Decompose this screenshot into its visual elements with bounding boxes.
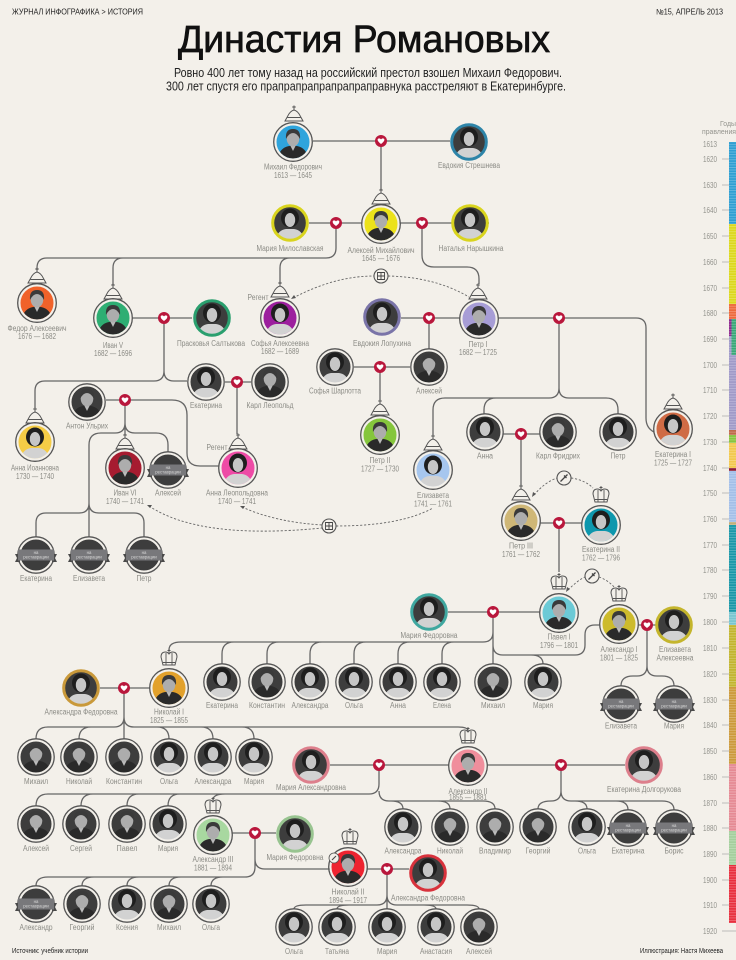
timeline year labels: 1770 — [703, 541, 717, 550]
person: Петр III: 1761 — 1762 — [502, 550, 540, 559]
person: Евдокия Стрешнева — [438, 125, 500, 170]
person: Елизавета: 1741 — 1761 — [414, 500, 452, 508]
person: Екатерина, portrait under restoration — [15, 537, 57, 583]
person: Елизавета, portrait under restoration — [600, 686, 642, 730]
person: Софья Алексеевна — [248, 293, 309, 356]
children of Александр III: Георгий — [70, 923, 94, 932]
person: Александр I — [600, 605, 638, 662]
timeline year labels: 1820 — [703, 670, 717, 679]
children of Николай I: Николай — [66, 777, 92, 786]
person: Петр I — [459, 300, 498, 357]
person: Алексей, portrait under restoration: на — [166, 465, 171, 470]
person: Анна — [467, 414, 503, 460]
person: Петр, portrait under restoration: на — [142, 550, 147, 555]
children of Александр II, first row: Алексей — [23, 844, 49, 853]
person: Екатерина II — [582, 506, 620, 562]
person: Анна Иоанновна: 1730 — 1740 — [16, 472, 54, 481]
person: Екатерина Долгорукова — [607, 748, 681, 794]
person: Антон Ульрих: Антон Ульрих — [66, 422, 108, 430]
person: Елизавета Алексеевна: Елизавета — [659, 645, 691, 654]
timeline heading: правления — [702, 129, 736, 136]
person: Елизавета, portrait under restoration: на — [619, 699, 624, 704]
timeline year labels: 1910 — [703, 901, 717, 910]
person: Мария Федоровна: Мария Федоровна — [266, 853, 324, 862]
children of Александр II, first row: Сергей — [70, 844, 92, 853]
timeline year labels: 1920 — [703, 927, 717, 936]
person: Софья Алексеевна: Регент — [248, 293, 269, 302]
children of Александр III: Михаил — [157, 923, 181, 932]
person: Мария, portrait under restoration — [653, 686, 695, 730]
person: Петр: Петр — [610, 452, 626, 460]
person: Петр I: 1682 — 1725 — [459, 348, 497, 357]
children of Александр II, first row: Павел — [116, 844, 138, 853]
person: Александр II: Александр II — [448, 787, 488, 796]
person: Иван V: 1682 — 1696 — [94, 349, 132, 358]
person: Екатерина, portrait under restoration — [607, 810, 649, 856]
timeline year labels: 1680 — [703, 309, 717, 318]
timeline year labels: 1730 — [703, 438, 717, 447]
person: Петр II — [361, 416, 399, 474]
children of Александр III: Ольга — [202, 923, 220, 932]
children of Николай II: Мария — [377, 947, 397, 956]
person: Мария, portrait under restoration: на — [672, 699, 677, 704]
children of Александр II, second row: Георгий — [526, 846, 550, 856]
person: Екатерина I: 1725 — 1727 — [654, 458, 692, 468]
timeline year labels: 1670 — [703, 284, 717, 293]
person: Александр II: 1855 — 1881 — [449, 793, 487, 802]
person: Мария Федоровна: Мария Федоровна — [400, 631, 458, 640]
person: Борис, portrait under restoration: на — [672, 823, 677, 828]
children of Павел I: Ольга — [345, 701, 363, 710]
children of Николай I: Михаил — [24, 777, 48, 786]
person: Наталья Нарышкина — [438, 206, 504, 253]
person: Прасковья Салтыкова — [177, 301, 245, 348]
children of Павел I: Константин — [249, 701, 285, 710]
timeline year labels: 1690 — [703, 335, 717, 344]
person: Петр, portrait under restoration: реставрации — [131, 554, 157, 560]
person: Алексей — [411, 349, 447, 396]
person: Карл Леопольд — [246, 364, 294, 410]
timeline heading: Годы — [720, 121, 736, 128]
children of Александр II, second row: Владимир — [479, 846, 511, 856]
timeline year labels: 1640 — [703, 206, 717, 215]
children of Павел I — [204, 664, 561, 710]
children of Николай II: Анастасия — [420, 947, 452, 956]
person: Алексей, portrait under restoration — [147, 452, 189, 498]
timeline year labels: 1880 — [703, 824, 717, 833]
person: Евдокия Стрешнева: Евдокия Стрешнева — [438, 161, 500, 170]
timeline year labels: 1810 — [703, 644, 717, 653]
children of Павел I: Мария — [533, 701, 553, 710]
person: Екатерина, portrait under restoration: реставрации — [23, 554, 49, 560]
person: Николай II: Николай II — [332, 888, 364, 896]
person: Мария Александровна — [276, 748, 346, 792]
person: Мария Милославская: Мария Милославская — [256, 244, 324, 253]
person: Анна Леопольдовна: 1740 — 1741 — [218, 497, 256, 506]
person: Петр I: Петр I — [468, 340, 488, 349]
person: Екатерина, portrait under restoration: Екатерина — [612, 846, 645, 856]
children of Николай I: Константин — [106, 777, 142, 786]
person: Федор Алексеевич: Федор Алексеевич — [8, 324, 66, 333]
person: Анна Леопольдовна — [206, 443, 268, 506]
person: Петр II: 1727 — 1730 — [361, 464, 399, 474]
person: Александр, portrait under restoration: Александр — [20, 923, 53, 932]
timeline year labels: 1840 — [703, 721, 717, 730]
person: Александр, portrait under restoration: реставрации — [23, 904, 49, 908]
person: Екатерина Долгорукова: Екатерина Долгорукова — [607, 785, 681, 794]
person: Анна Леопольдовна: Анна Леопольдовна — [206, 488, 268, 498]
person: Евдокия Лопухина: Евдокия Лопухина — [353, 339, 411, 348]
person: Мария, portrait under restoration: реставрации — [661, 704, 687, 708]
person: Анна Иоанновна — [11, 423, 59, 481]
reign timeline — [702, 121, 736, 936]
person: Карл Фридрих — [536, 414, 580, 460]
person: Александра Федоровна — [44, 671, 118, 716]
person: Александр II — [448, 747, 488, 802]
timeline ticks — [722, 159, 736, 931]
children of Николай II: Татьяна — [325, 947, 349, 956]
person: Екатерина: Екатерина — [190, 401, 222, 410]
icon: sword coup 1801 — [585, 569, 599, 583]
timeline year labels: 1613 — [703, 140, 717, 149]
person: Борис, portrait under restoration: Борис — [664, 846, 684, 856]
person: Александр, portrait under restoration: на — [34, 899, 39, 904]
person: Антон Ульрих — [66, 384, 108, 430]
person: Алексей, portrait under restoration: реставрации — [155, 470, 181, 474]
person: Екатерина, portrait under restoration: на — [626, 823, 631, 828]
timeline year labels: 1650 — [703, 232, 717, 241]
person: Елизавета, portrait under restoration: Елизавета — [605, 722, 637, 730]
icon: sword coup 1762 — [557, 471, 571, 485]
person: Мария Милославская — [256, 206, 324, 253]
children of Александр II, second row: Николай — [437, 846, 463, 856]
person: Елизавета, portrait under restoration — [68, 537, 110, 583]
dashed succession arcs — [147, 276, 615, 592]
timeline year labels: 1800 — [703, 618, 717, 627]
title: Династия Романовых — [178, 19, 550, 61]
person: Федор Алексеевич — [8, 284, 66, 341]
timeline year labels: 1830 — [703, 696, 717, 705]
children of Александр III — [64, 886, 229, 932]
person: Елизавета — [414, 451, 452, 508]
marriage heart markers — [118, 135, 653, 875]
timeline year labels: 1870 — [703, 799, 717, 808]
person: Алексей: Алексей — [416, 386, 442, 396]
person: Александра Федоровна — [391, 856, 465, 902]
person: Екатерина II: 1762 — 1796 — [582, 554, 620, 562]
header: magazine section: ЖУРНАЛ ИНФОГРАФИКА > ИСТОРИЯ — [12, 8, 143, 16]
person: Елизавета: Елизавета — [417, 491, 449, 500]
person: Софья Шарлотта — [309, 349, 361, 396]
timeline year labels: 1700 — [703, 361, 717, 370]
person: Прасковья Салтыкова: Прасковья Салтыкова — [177, 339, 245, 348]
children of Павел I: Елена — [433, 701, 451, 710]
subtitle: 300 лет спустя его прапрапрапрапрапраправнука расстреляют в Екатеринбурге. — [166, 80, 566, 94]
timeline year labels: 1900 — [703, 876, 717, 885]
person: Елизавета, portrait under restoration: Елизавета — [73, 574, 105, 583]
children of Николай II: Алексей — [466, 947, 492, 956]
children of Николай I: Александра — [194, 777, 232, 786]
person: Екатерина II: Екатерина II — [582, 545, 620, 554]
timeline heading — [702, 121, 736, 136]
children of Николай I — [18, 739, 272, 786]
person: Софья Алексеевна: 1682 — 1689 — [261, 347, 299, 356]
person: Иван VI — [106, 449, 144, 506]
person: Петр III — [502, 502, 540, 559]
person: Карл Леопольд: Карл Леопольд — [246, 401, 294, 410]
footer: illustration credit: Иллюстрация: Настя Михеева — [640, 948, 723, 955]
person: Петр — [600, 414, 636, 460]
timeline year labels: 1660 — [703, 258, 717, 267]
person: Анна: Анна — [477, 452, 493, 460]
person: Мария Федоровна — [266, 817, 324, 862]
children of Александр II, second row — [384, 809, 605, 856]
timeline year labels: 1710 — [703, 386, 717, 395]
person: Борис, portrait under restoration — [653, 810, 695, 856]
children of Павел I: Екатерина — [206, 701, 238, 710]
person: Мария Александровна: Мария Александровна — [276, 783, 346, 792]
icon: regency grid bottom — [322, 519, 336, 533]
header: issue: №15, АПРЕЛЬ 2013 — [656, 8, 723, 16]
person: Александр III: Александр III — [192, 855, 234, 864]
timeline year labels — [703, 140, 717, 936]
person: Софья Алексеевна: Софья Алексеевна — [251, 339, 309, 348]
person: Иван VI: 1740 — 1741 — [106, 497, 144, 506]
children of Николай I: Ольга — [160, 777, 178, 786]
person: Петр, portrait under restoration — [123, 537, 165, 583]
person: Алексей Михайлович — [348, 205, 414, 263]
subtitle — [166, 66, 566, 94]
person: Елизавета Алексеевна — [656, 608, 694, 662]
person: Иван V: Иван V — [103, 341, 123, 350]
timeline year labels: 1790 — [703, 592, 717, 601]
children of Павел I: Анна — [390, 701, 406, 710]
person: Алексей, portrait under restoration: Алексей — [155, 488, 181, 498]
person: Петр III: Петр III — [509, 542, 533, 550]
person: Анна Леопольдовна: Регент — [206, 443, 228, 452]
children of Николай II — [276, 909, 497, 956]
person: Анна Иоанновна: Анна Иоанновна — [11, 464, 59, 472]
children of Александр II, second row: Ольга — [578, 846, 596, 856]
person: Екатерина — [188, 364, 224, 410]
person: Екатерина I: Екатерина I — [655, 450, 691, 459]
person: Елизавета, portrait under restoration: реставрации — [76, 554, 102, 560]
person: Николай I: 1825 — 1855 — [150, 716, 188, 725]
person: Алексей Михайлович: Алексей Михайлович — [348, 246, 414, 255]
monomakh caps — [26, 106, 682, 500]
children of Александр II, first row — [18, 806, 186, 853]
timeline year labels: 1720 — [703, 412, 717, 421]
person: Николай I: Николай I — [154, 708, 184, 716]
timeline year labels: 1630 — [703, 181, 717, 190]
person: Елизавета, portrait under restoration: на — [87, 550, 92, 555]
person: Карл Фридрих: Карл Фридрих — [536, 452, 580, 460]
person: Николай II: 1894 — 1917 — [329, 896, 367, 905]
icon: regency grid top — [374, 269, 388, 283]
timeline year labels: 1850 — [703, 747, 717, 756]
person: Александр III — [192, 816, 234, 872]
person: Мария, portrait under restoration: Мария — [664, 722, 684, 730]
timeline year labels: 1750 — [703, 489, 717, 498]
person: Михаил Федорович: 1613 — 1645 — [274, 171, 312, 180]
footer: source: Источник: учебник истории — [12, 947, 88, 955]
person: Екатерина, portrait under restoration: на — [34, 550, 39, 555]
person: Петр, portrait under restoration: Петр — [136, 574, 152, 583]
children of Николай I: Мария — [244, 777, 264, 786]
children of Александр II, second row: Александра — [384, 846, 422, 856]
person: Николай I — [150, 669, 188, 725]
subtitle: Ровно 400 лет тому назад на российский престол взошел Михаил Федорович. — [174, 66, 562, 80]
timeline year labels: 1860 — [703, 773, 717, 782]
person: Софья Шарлотта: Софья Шарлотта — [309, 386, 361, 396]
person: Иван VI: Иван VI — [114, 488, 136, 498]
person: Александра Федоровна: Александра Федоровна — [391, 894, 465, 902]
person: Елизавета Алексеевна: Алексеевна — [656, 654, 694, 662]
person: Александр, portrait under restoration — [15, 886, 57, 932]
person: Елизавета, portrait under restoration: реставрации — [608, 704, 634, 708]
person: Александр I: Александр I — [600, 645, 638, 654]
person: Александр III: 1881 — 1894 — [194, 864, 232, 872]
person: Алексей Михайлович: 1645 — 1676 — [362, 254, 400, 263]
person: Александра Федоровна: Александра Федоровна — [44, 708, 118, 716]
children of Александр II, first row: Мария — [158, 844, 178, 853]
person: Павел I: 1796 — 1801 — [540, 641, 578, 650]
timeline colour bar — [729, 142, 736, 923]
imperial crowns — [161, 486, 627, 844]
timeline year labels: 1780 — [703, 566, 717, 575]
person: Мария Федоровна — [400, 595, 458, 640]
children of Павел I: Михаил — [481, 701, 505, 710]
children of Александр III: Ксения — [116, 923, 138, 932]
person: Екатерина I — [654, 410, 692, 468]
timeline year labels: 1890 — [703, 850, 717, 859]
timeline year labels: 1740 — [703, 464, 717, 473]
person: Екатерина, portrait under restoration: реставрации — [615, 828, 641, 832]
person: Павел I — [540, 594, 578, 650]
person: Николай II — [329, 848, 367, 905]
person: Михаил Федорович: Михаил Федорович — [264, 162, 322, 172]
person: Федор Алексеевич: 1676 — 1682 — [18, 332, 56, 341]
person: Павел I: Павел I — [548, 632, 570, 642]
person: Александр I: 1801 — 1825 — [600, 654, 638, 662]
connector lines of the family tree — [35, 141, 674, 909]
timeline year labels: 1620 — [703, 155, 717, 164]
person: Екатерина, portrait under restoration: Екатерина — [20, 574, 52, 583]
person: Борис, portrait under restoration: реставрации — [661, 828, 687, 832]
person: Евдокия Лопухина — [353, 300, 411, 348]
timeline year labels: 1760 — [703, 515, 717, 524]
person: Михаил Федорович — [264, 123, 322, 180]
person: Петр II: Петр II — [370, 456, 390, 465]
person: Наталья Нарышкина: Наталья Нарышкина — [438, 244, 504, 253]
children of Николай II: Ольга — [285, 947, 303, 956]
children of Павел I: Александра — [292, 701, 329, 710]
person: Иван V — [94, 299, 132, 358]
